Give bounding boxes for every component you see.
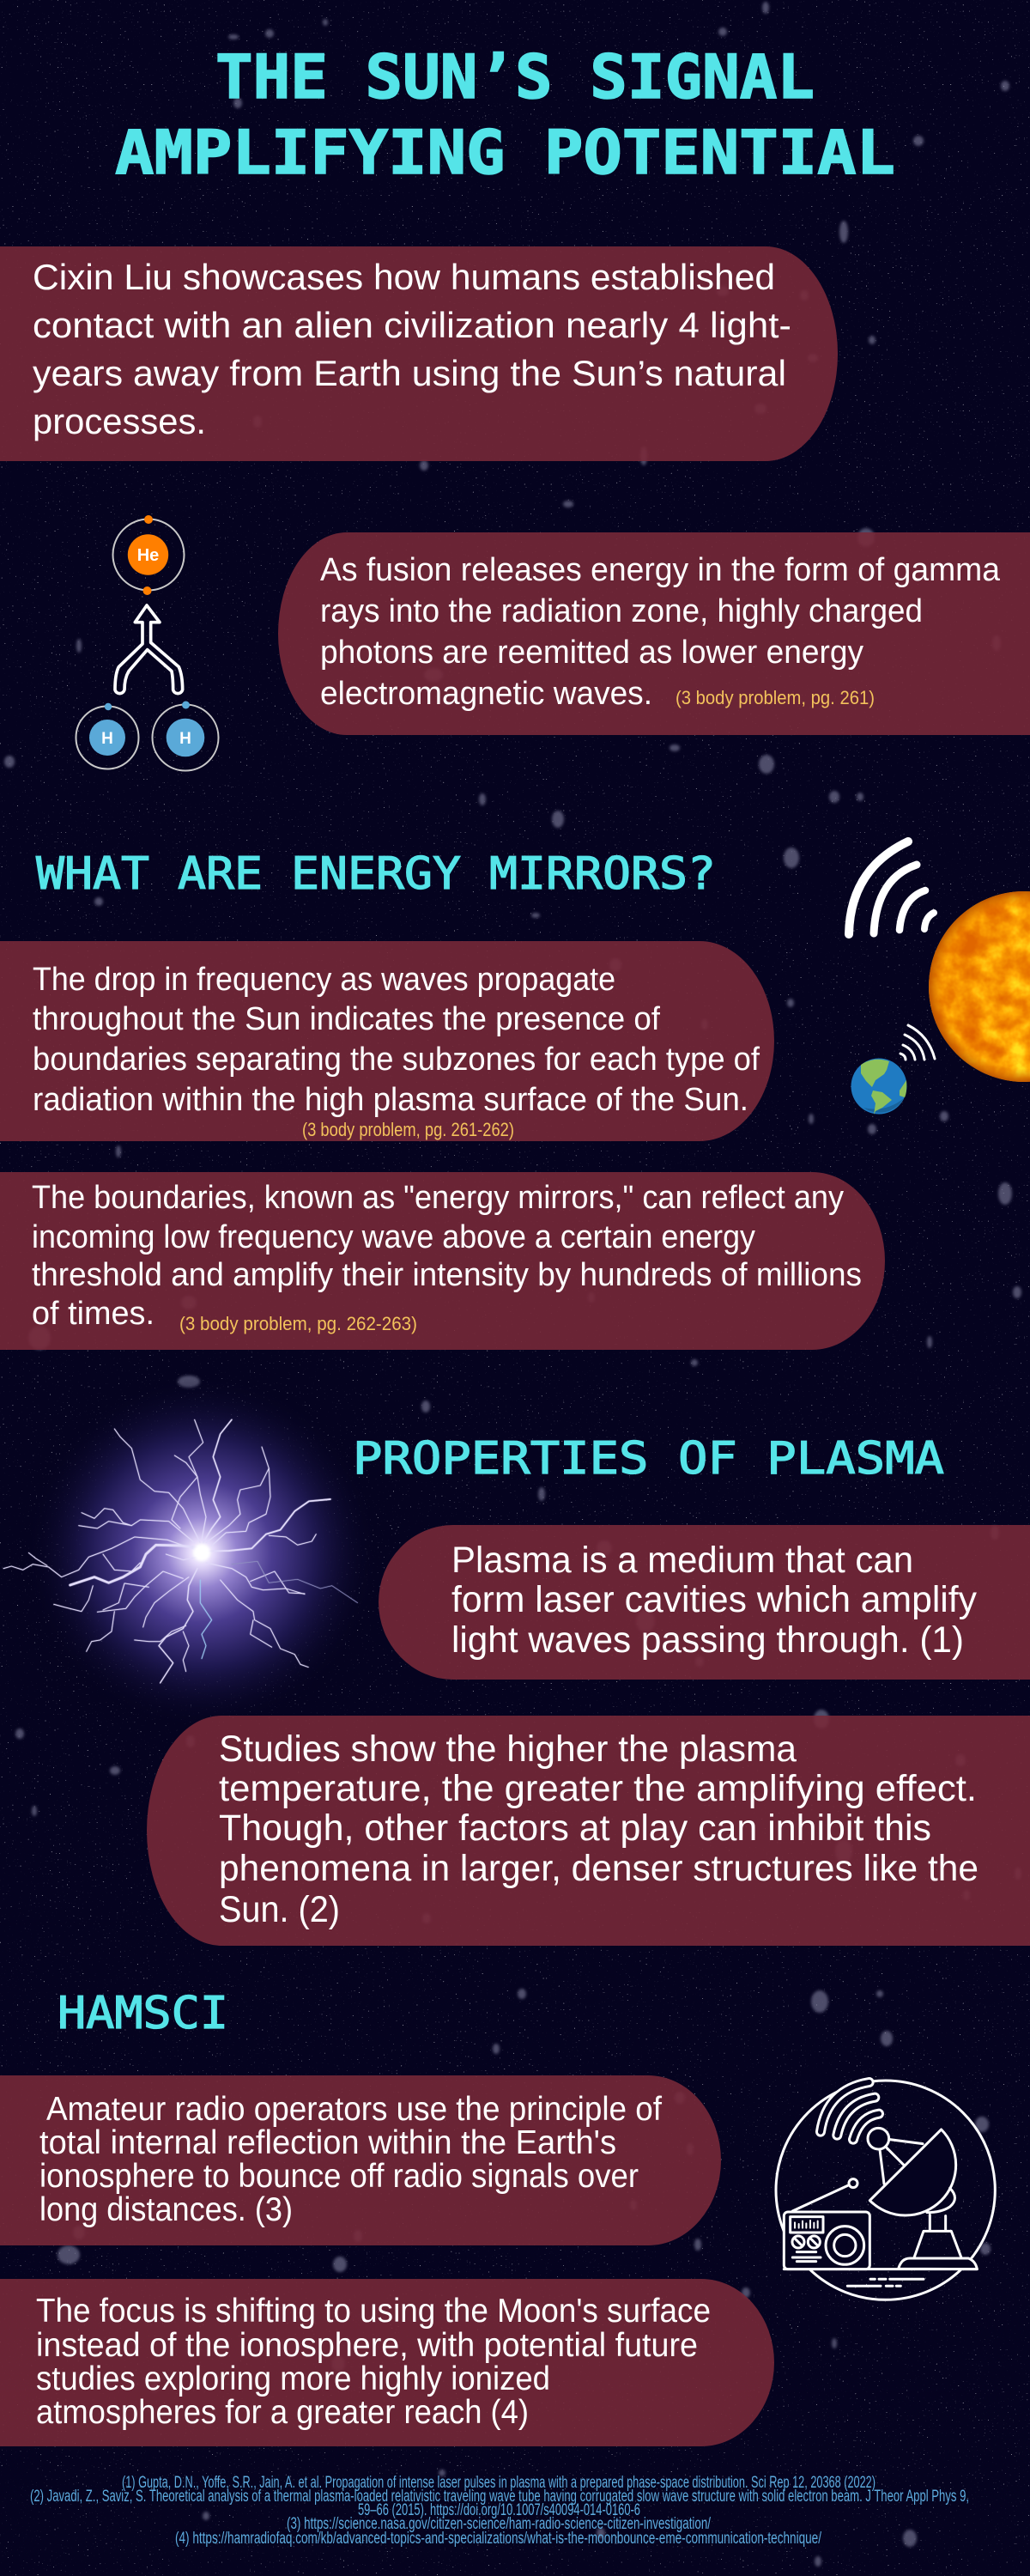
panel: plasma temperature studies: Though, other factors at play can inhibit this [219, 1807, 931, 1849]
panel: fusion and photons: electromagnetic waves. [320, 676, 652, 712]
panel: moon bounce: studies exploring more highly ionized [36, 2360, 550, 2397]
panel: intro: years away from Earth using the Sun’s natural [33, 353, 786, 393]
panel: frequency drop and boundaries: (3 body problem, pg. 261-262) [302, 1119, 514, 1140]
panel: plasma laser cavities: light waves passing through. (1) [451, 1619, 964, 1661]
title: AMPLIFYING POTENTIAL [115, 118, 895, 188]
panel: intro: processes. [33, 401, 206, 441]
panel: amateur radio: Amateur radio operators use the principle of [46, 2091, 662, 2128]
panel: plasma laser cavities [379, 1525, 1030, 1680]
panel: frequency drop and boundaries: radiation within the high plasma surface of the Sun. [33, 1082, 748, 1118]
icon: radio and satellite dish [776, 2081, 995, 2300]
panel: frequency drop and boundaries [0, 941, 774, 1141]
panel: intro: Cixin Liu showcases how humans established [33, 257, 775, 297]
panel: amateur radio: total internal reflection within the Earth's [39, 2124, 616, 2161]
panel: fusion and photons: photons are reemitted as lower energy [320, 635, 863, 671]
panel: fusion and photons: As fusion releases energy in the form of gamma [320, 552, 1001, 588]
panel: amateur radio [0, 2075, 721, 2245]
icon: hydrogen fusing into helium [76, 515, 218, 771]
panel: moon bounce: instead of the ionosphere, with potential future [36, 2327, 698, 2364]
panel: energy mirrors definition: of times. [32, 1296, 154, 1332]
panel: amateur radio: ionosphere to bounce off radio signals over [39, 2158, 639, 2195]
references: (3) https://science.nasa.gov/citizen-science/ham-radio-science-citizen-investigation/ [287, 2515, 712, 2533]
panel: frequency drop and boundaries: The drop in frequency as waves propagate [33, 962, 615, 998]
panel: plasma temperature studies [147, 1716, 1030, 1946]
panel: plasma temperature studies: Studies show the higher the plasma [219, 1728, 797, 1770]
panel: energy mirrors definition: threshold and amplify their intensity by hundreds of millions [32, 1257, 862, 1293]
panel: fusion and photons: rays into the radiation zone, highly charged [320, 593, 923, 629]
icon: hydrogen fusing into helium: H [179, 730, 191, 748]
panel: moon bounce: atmospheres for a greater reach (4) [36, 2394, 529, 2431]
panel: moon bounce: The focus is shifting to using the Moon's surface [36, 2293, 711, 2330]
title: THE SUN’S SIGNAL [215, 42, 815, 112]
panel: energy mirrors definition: The boundaries, known as "energy mirrors," can reflect any [32, 1180, 844, 1216]
panel: fusion and photons: (3 body problem, pg. 261) [676, 687, 875, 708]
panel: energy mirrors definition: incoming low frequency wave above a certain energy [32, 1219, 755, 1255]
panel: moon bounce [0, 2279, 774, 2446]
panel: intro [0, 246, 838, 461]
references [30, 2474, 969, 2548]
heading: properties of plasma: PROPERTIES OF PLASMA [353, 1433, 944, 1485]
panel: intro: contact with an alien civilization nearly 4 light- [33, 305, 791, 345]
panel: energy mirrors definition: (3 body problem, pg. 262-263) [179, 1313, 417, 1334]
icon: hydrogen fusing into helium: H [101, 730, 113, 748]
panel: frequency drop and boundaries: boundaries separating the subzones for each type of [33, 1042, 760, 1078]
heading: hamsci: HAMSCI [58, 1988, 228, 2039]
icon: hydrogen fusing into helium: He [137, 546, 159, 565]
panel: fusion and photons [278, 532, 1030, 735]
panel: plasma temperature studies: temperature, the greater the amplifying effect. [219, 1768, 977, 1809]
panel: plasma temperature studies: Sun. (2) [219, 1889, 340, 1930]
heading: what are energy mirrors: WHAT ARE ENERGY MIRRORS? [36, 848, 716, 900]
panel: energy mirrors definition [0, 1172, 885, 1350]
panel: amateur radio: long distances. (3) [39, 2191, 293, 2228]
icon: sun with waves and earth [849, 841, 1030, 1115]
title [115, 42, 895, 188]
panel: plasma laser cavities: form laser cavities which amplify [451, 1579, 977, 1620]
references: 59–66 (2015). https://doi.org/10.1007/s40094-014-0160-6 [358, 2501, 640, 2519]
icon: plasma lightning burst [3, 1376, 378, 1728]
panel: plasma temperature studies: phenomena in larger, denser structures like the [219, 1848, 978, 1889]
panel: plasma laser cavities: Plasma is a medium that can [451, 1540, 913, 1581]
panel: frequency drop and boundaries: throughout the Sun indicates the presence of [33, 1001, 660, 1037]
